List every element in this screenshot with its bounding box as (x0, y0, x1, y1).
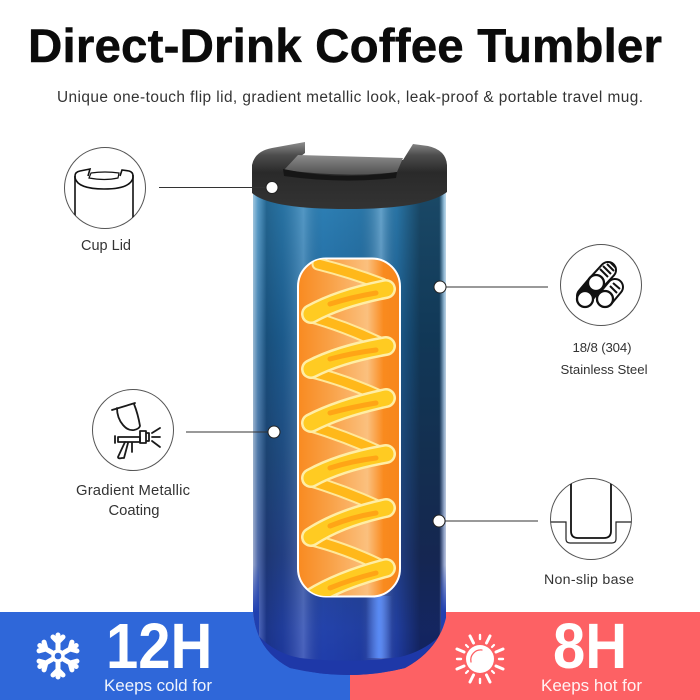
leader line (186, 431, 268, 433)
icon: spray gun (92, 390, 174, 470)
label: Coating (108, 503, 160, 519)
leader line (444, 286, 548, 288)
hot caption: Keeps hot for (541, 676, 642, 695)
label: Cup Lid (81, 238, 131, 254)
cold hours: 12H (106, 610, 212, 682)
label (76, 483, 191, 519)
window: heating element (298, 258, 400, 598)
icon: sun (457, 635, 503, 683)
leader line (443, 520, 538, 522)
panel: hot retention band (350, 610, 700, 700)
label (560, 340, 648, 377)
panel: cold retention band (0, 610, 350, 700)
callout: cup lid (64, 148, 278, 254)
marker dot (434, 281, 446, 293)
label: Stainless Steel (560, 362, 648, 377)
callout: stainless steel (434, 244, 648, 377)
marker dot (433, 515, 445, 527)
spiral coil (308, 264, 386, 598)
label: 18/8 (304) (572, 340, 632, 355)
leader line (159, 186, 268, 188)
label: Gradient Metallic (76, 483, 191, 499)
tumbler (250, 142, 450, 690)
icon: steel rods (560, 244, 642, 326)
hot hours: 8H (553, 610, 627, 682)
icon: cup lid (64, 148, 146, 228)
marker dot (266, 182, 278, 194)
cold caption: Keeps cold for (104, 676, 212, 695)
marker dot (268, 426, 280, 438)
icon: tumbler base (548, 475, 634, 560)
subtitle: Unique one-touch flip lid, gradient metallic look, leak-proof & portable travel mug. (57, 89, 643, 106)
tumbler body (250, 185, 450, 690)
icon: snowflake (37, 635, 79, 677)
callout: non-slip base (433, 475, 634, 588)
callout: gradient metallic coating (76, 390, 280, 519)
lid (252, 142, 447, 209)
title: Direct-Drink Coffee Tumbler (28, 20, 662, 73)
label: Non-slip base (544, 572, 634, 588)
